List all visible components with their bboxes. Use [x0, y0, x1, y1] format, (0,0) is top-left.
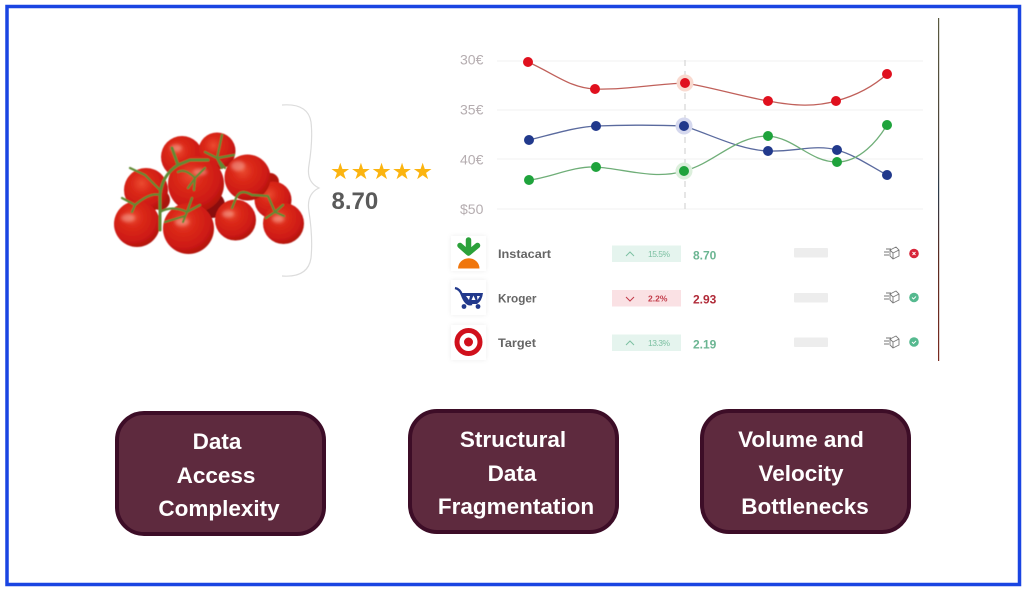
icon: Target logo [451, 325, 486, 360]
change badge [612, 246, 681, 262]
card: Structural Data Fragmentation [410, 411, 617, 532]
store name: Target [498, 338, 536, 350]
icon: package [884, 336, 899, 348]
icon: ok status [909, 293, 919, 302]
store name: Instacart [498, 249, 551, 261]
green series [524, 120, 892, 185]
chart y axis labels [460, 52, 484, 217]
card: Volume and Velocity Bottlenecks: Bottlenecks [741, 494, 869, 519]
card: Data Access Complexity: Data [193, 429, 242, 454]
red series [523, 57, 892, 106]
chart grid lines [497, 61, 923, 209]
icon: error status [909, 249, 919, 258]
chart y axis labels: 30€ [460, 52, 484, 68]
card: Data Access Complexity: Complexity [158, 496, 280, 521]
price: 2.19 [693, 338, 717, 352]
line chart [460, 52, 923, 217]
change badge: 2.2% [648, 294, 668, 304]
change badge: 13.3% [648, 338, 670, 348]
chart y axis labels: $50 [460, 201, 484, 217]
right edge stripe [938, 18, 939, 361]
icon: tomato cluster [114, 132, 304, 254]
price: 2.93 [693, 292, 717, 306]
change badge: 15.5% [648, 249, 670, 259]
store name: Kroger [498, 294, 537, 306]
star rating: ★★★★★ [330, 159, 433, 185]
row: Kroger [451, 280, 919, 315]
icon: ok status [909, 337, 919, 347]
card: Volume and Velocity Bottlenecks [702, 411, 909, 532]
icon: package [884, 247, 899, 259]
change badge [612, 334, 681, 351]
icon: Instacart logo [451, 236, 486, 271]
change badge [612, 290, 681, 306]
card: Structural Data Fragmentation: Structural [460, 427, 566, 452]
row: Instacart [451, 236, 919, 271]
icon: Kroger logo [451, 280, 486, 315]
blue series [524, 118, 892, 180]
chart y axis labels: 40€ [460, 152, 484, 168]
card: Data Access Complexity [117, 413, 324, 534]
chart y axis labels: 35€ [460, 102, 484, 118]
card: Structural Data Fragmentation: Data [488, 461, 537, 486]
rating value: 8.70 [332, 188, 378, 215]
curly brace [282, 105, 319, 276]
card: Volume and Velocity Bottlenecks: Velocity [758, 461, 844, 486]
card: Data Access Complexity: Access [177, 463, 255, 488]
icon: package [884, 291, 899, 303]
row: Target [451, 325, 919, 360]
price: 8.70 [693, 248, 717, 262]
card: Structural Data Fragmentation: Fragmentation [438, 494, 594, 519]
card: Volume and Velocity Bottlenecks: Volume and [738, 427, 864, 452]
